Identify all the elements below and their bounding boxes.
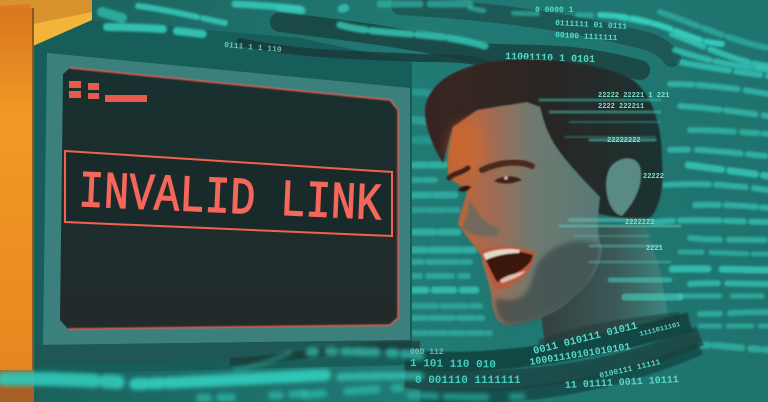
binary text: ribbon around neck: 1 101 110 010 [410,358,496,371]
man: face [448,102,602,325]
binary text: ribbon around neck: 1111011101 [639,321,681,339]
error box [65,151,392,236]
binary text: hair streams [598,92,669,253]
data streams: top [102,4,768,70]
binary text: ribbon around neck: 0 001110 1111111 [415,375,521,387]
binary text: top: 0111111 01 0111 [555,19,627,32]
man: brows and eyes [449,163,532,192]
binary text: ribbon around neck: 0011 010111 01011 [532,320,639,358]
data streams: background right [655,12,768,350]
man: stubble shadow [496,241,600,325]
man: mouth [480,246,535,290]
screen frame line [68,68,398,329]
binary text: hair streams: 22222222 [607,137,641,145]
dark ribbons: top [240,6,672,70]
binary text: hair streams: 22222 22221 1 221 [598,92,669,100]
status icons [69,81,147,102]
binary text: ribbon around neck: 00D 112 [410,348,444,357]
binary text: hair streams: 22222 [643,173,664,181]
binary text: top: 11001110 1 0101 [505,52,595,66]
dark ribbons: lower [230,318,700,397]
binary text: hair streams: 2221 [646,245,663,253]
man: neck [540,225,668,345]
man: ear [606,158,641,216]
binary text: top [224,6,627,66]
binary text: ribbon around neck: 11 01111 0011 10111 [565,375,679,392]
binary text: ribbon around neck [410,320,681,392]
binary text: hair streams: 2222222 [625,219,654,227]
screen [60,68,398,329]
binary text: ribbon around neck: 0100111 11111 [599,358,662,381]
binary text: top: 0111 1 1 110 [224,41,282,55]
binary text: hair streams: 2222 222211 [598,103,644,111]
data streams: lower blurred band [4,351,560,398]
man: orange forehead light [450,122,486,174]
binary text: top: 00100 1111111 [555,31,618,43]
error text: INVALID LINK [77,163,383,235]
laptop body: orange side panel [0,0,92,402]
binary text: top: 0 0000 1 [535,6,574,15]
monitor bezel [34,20,412,374]
binary text: ribbon around neck: 10001110101010101 [529,342,631,369]
man: motion streaks [540,100,680,297]
man: nose shadow [462,200,500,237]
data streams: gap between screen and face [410,92,490,333]
man: hair [425,59,662,222]
